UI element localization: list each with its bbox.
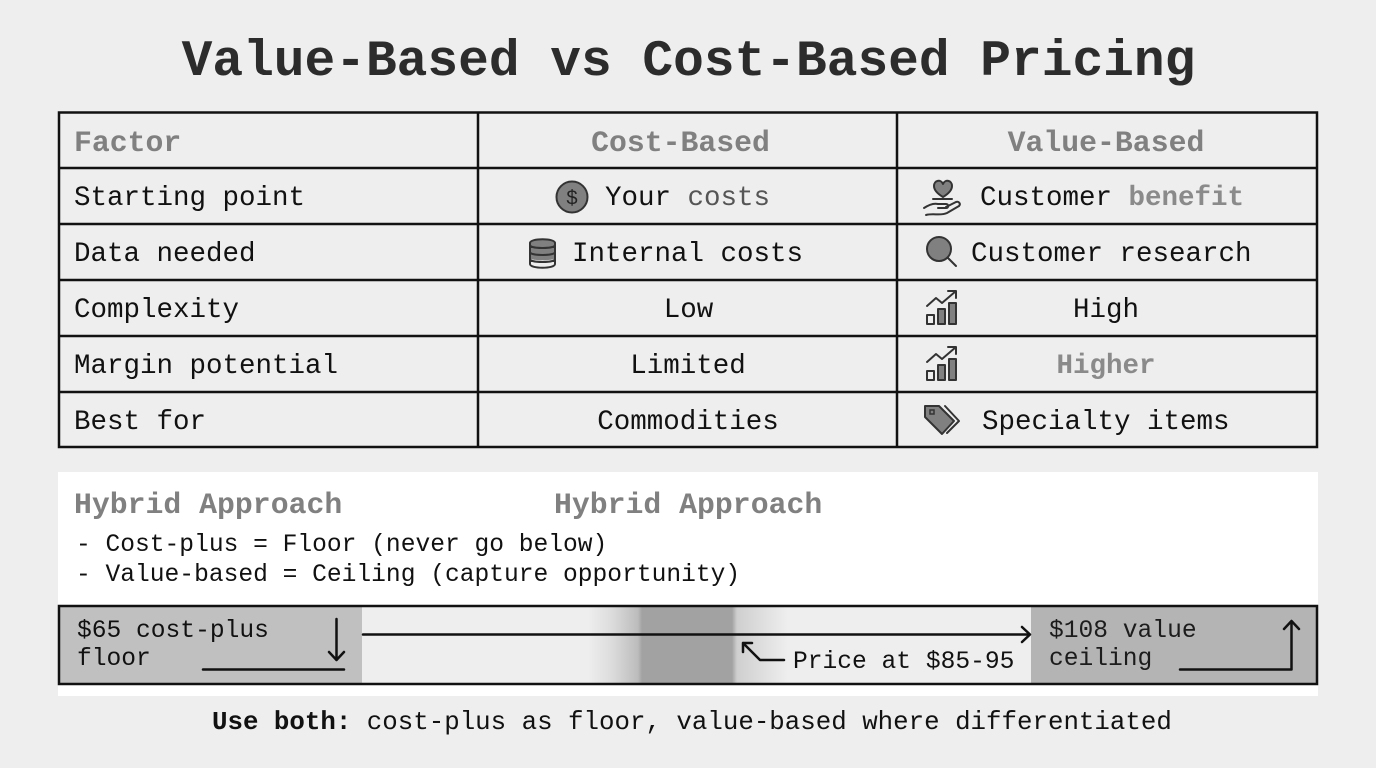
footer takeaway: Use both: cost-plus as floor, value-based where differentiated bbox=[212, 708, 1172, 737]
row: best for: Best for bbox=[74, 407, 206, 438]
row: starting point bbox=[74, 181, 1244, 215]
arrow: up to ceiling bbox=[1180, 621, 1299, 670]
floor segment: floor bbox=[77, 646, 151, 673]
row: best for: Specialty items bbox=[982, 407, 1230, 438]
row: data needed: Internal costs bbox=[572, 239, 803, 270]
row: best for bbox=[74, 406, 1230, 438]
callout: price at 85-95 bbox=[743, 643, 1014, 676]
row: complexity: High bbox=[1073, 295, 1139, 326]
row: complexity: Complexity bbox=[74, 295, 239, 326]
price zone bbox=[588, 607, 788, 683]
row: data needed: Customer research bbox=[971, 239, 1252, 270]
callout: price at 85-95: Price at $85-95 bbox=[793, 649, 1014, 676]
icon: magnifier bbox=[927, 237, 956, 266]
row: margin potential: Margin potential bbox=[74, 351, 338, 382]
table grid bbox=[59, 112, 1317, 447]
row: starting point: Your costs bbox=[605, 183, 770, 214]
row: best for: Commodities bbox=[597, 407, 779, 438]
row: starting point: Customer benefit bbox=[980, 183, 1244, 214]
arrow: floor to ceiling bbox=[363, 627, 1030, 642]
bar border bbox=[59, 606, 1317, 684]
icon: dollar coin: $ bbox=[566, 188, 578, 211]
header row: Value-Based bbox=[1008, 126, 1204, 160]
floor segment bbox=[59, 606, 362, 684]
icon: price tags bbox=[925, 406, 959, 434]
row: margin potential: Higher bbox=[1056, 351, 1156, 382]
heading: hybrid approach: Hybrid Approach bbox=[74, 488, 342, 522]
ceiling segment: ceiling bbox=[1049, 646, 1152, 673]
text: hybrid bullets: - Value-based = Ceiling (capture opportunity) bbox=[76, 562, 740, 589]
icon: growth chart bbox=[927, 291, 956, 324]
bar track bbox=[59, 606, 1317, 684]
row: starting point: Starting point bbox=[74, 183, 305, 214]
row: margin potential: Limited bbox=[630, 351, 746, 382]
text: hybrid bullets: - Cost-plus = Floor (never go below) bbox=[76, 532, 607, 559]
comparison table bbox=[59, 112, 1317, 447]
row: data needed: Data needed bbox=[74, 239, 256, 270]
row: complexity bbox=[74, 291, 1139, 326]
arrow: down to floor bbox=[203, 619, 344, 670]
floor segment: $65 cost-plus bbox=[77, 618, 269, 645]
row: margin potential bbox=[74, 347, 1156, 382]
ceiling segment: $108 value bbox=[1049, 618, 1197, 645]
header row: Factor bbox=[74, 126, 181, 160]
price range bar bbox=[59, 606, 1317, 684]
icon: hand with heart bbox=[924, 181, 960, 215]
header row: Cost-Based bbox=[591, 126, 770, 160]
icon: dollar coin bbox=[556, 182, 588, 212]
row: complexity: Low bbox=[664, 295, 714, 326]
heading: hybrid approach repeated: Hybrid Approach bbox=[554, 488, 822, 522]
icon: database bbox=[530, 239, 555, 268]
title: Value-Based vs Cost-Based Pricing bbox=[182, 33, 1195, 91]
text: hybrid bullets bbox=[76, 532, 740, 589]
panel: hybrid approach bbox=[58, 472, 1318, 696]
ceiling segment bbox=[1031, 606, 1317, 684]
row: data needed bbox=[74, 237, 1252, 270]
header row bbox=[74, 126, 1204, 160]
icon: growth chart bbox=[927, 347, 956, 380]
